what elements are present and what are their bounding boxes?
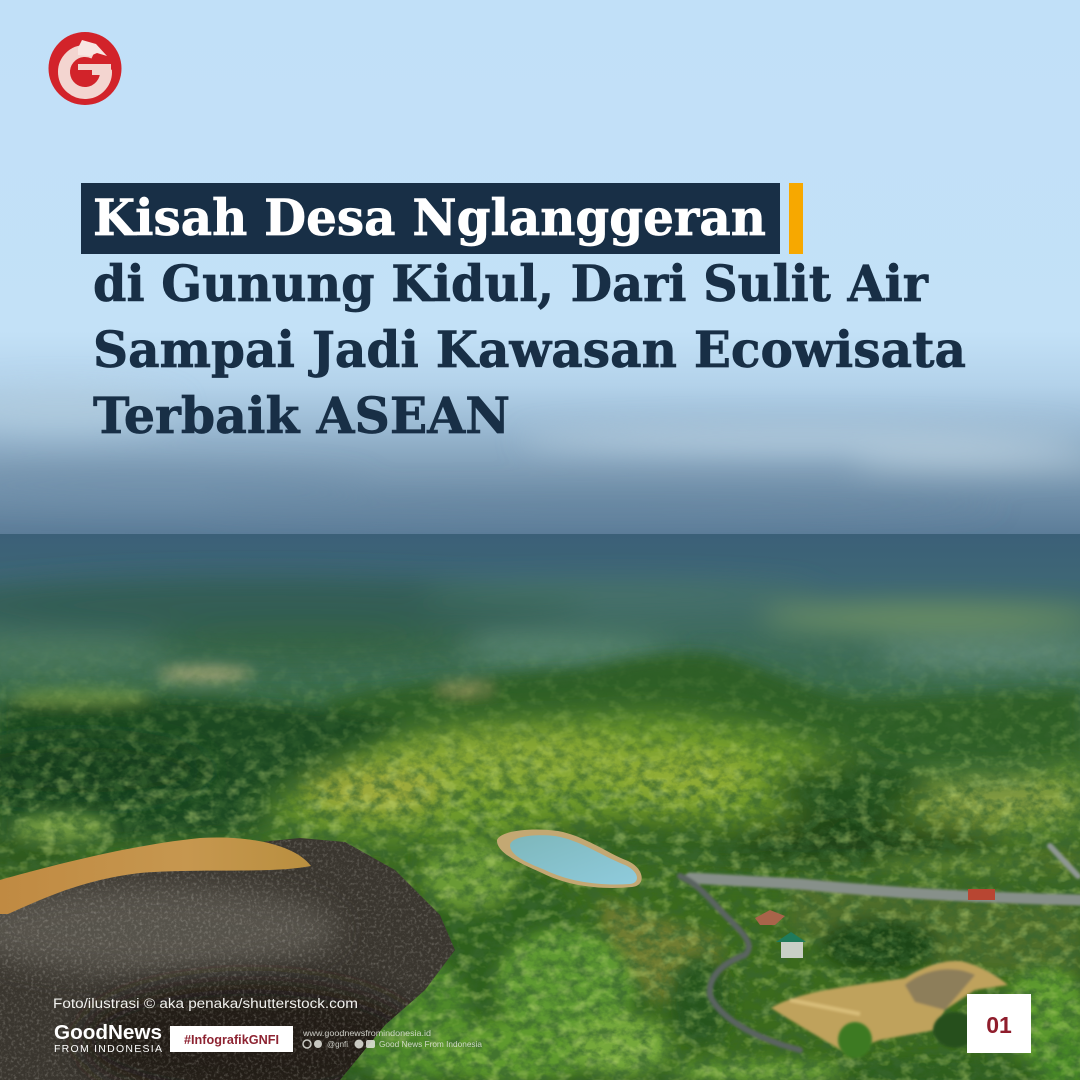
distant hills and valley haze [0, 577, 1080, 667]
red truck on road [968, 889, 995, 900]
website and social handles: www.goodnewsfromindonesia.id [302, 1028, 431, 1038]
title: Terbaik ASEAN [93, 386, 510, 445]
photo credit: Foto/ilustrasi © aka penaka/shutterstock.com [53, 996, 358, 1011]
lower valley [400, 842, 1080, 1080]
yellow accent bar [789, 183, 803, 254]
foreground bushes [330, 840, 1080, 1080]
title: Sampai Jadi Kawasan Ecowisata [93, 320, 966, 379]
logo: GNFI red circle emblem [48, 32, 122, 105]
hashtag label [170, 1026, 293, 1052]
green-roofed house [776, 932, 806, 958]
small brown hut [755, 910, 785, 925]
GoodNews From Indonesia wordmark [54, 1022, 162, 1055]
website and social handles [302, 1028, 482, 1049]
reservoir pool [497, 829, 642, 888]
rock outcrop [0, 838, 460, 1080]
GoodNews From Indonesia wordmark: FROM INDONESIA [54, 1043, 162, 1055]
website and social handles: Good News From Indonesia [379, 1039, 482, 1049]
title: di Gunung Kidul, Dari Sulit Air [93, 254, 929, 313]
terraces on left [0, 813, 114, 870]
road [680, 846, 1080, 1050]
forest texture [0, 620, 1080, 1080]
rice field [771, 961, 1008, 1052]
hashtag label: #InfografikGNFI [184, 1033, 279, 1047]
page number badge: 01 [986, 1012, 1012, 1038]
clouds near horizon [0, 388, 1080, 517]
website and social handles: @gnfi [327, 1040, 348, 1049]
page number badge [967, 994, 1031, 1053]
title [93, 188, 966, 445]
social icons [303, 1040, 375, 1048]
trees around field [838, 1012, 977, 1058]
title highlight block [81, 183, 780, 254]
sunlit forest slopes [0, 715, 1080, 862]
dry golden grass on rock [0, 837, 311, 914]
photo background: landscape of Nglanggeran [0, 356, 1080, 1080]
land base [0, 534, 1080, 1080]
title: Kisah Desa Nglanggeran [93, 188, 766, 247]
sky [0, 0, 1080, 535]
mid hills [0, 653, 1080, 850]
GoodNews From Indonesia wordmark: GoodNews [54, 1022, 162, 1044]
